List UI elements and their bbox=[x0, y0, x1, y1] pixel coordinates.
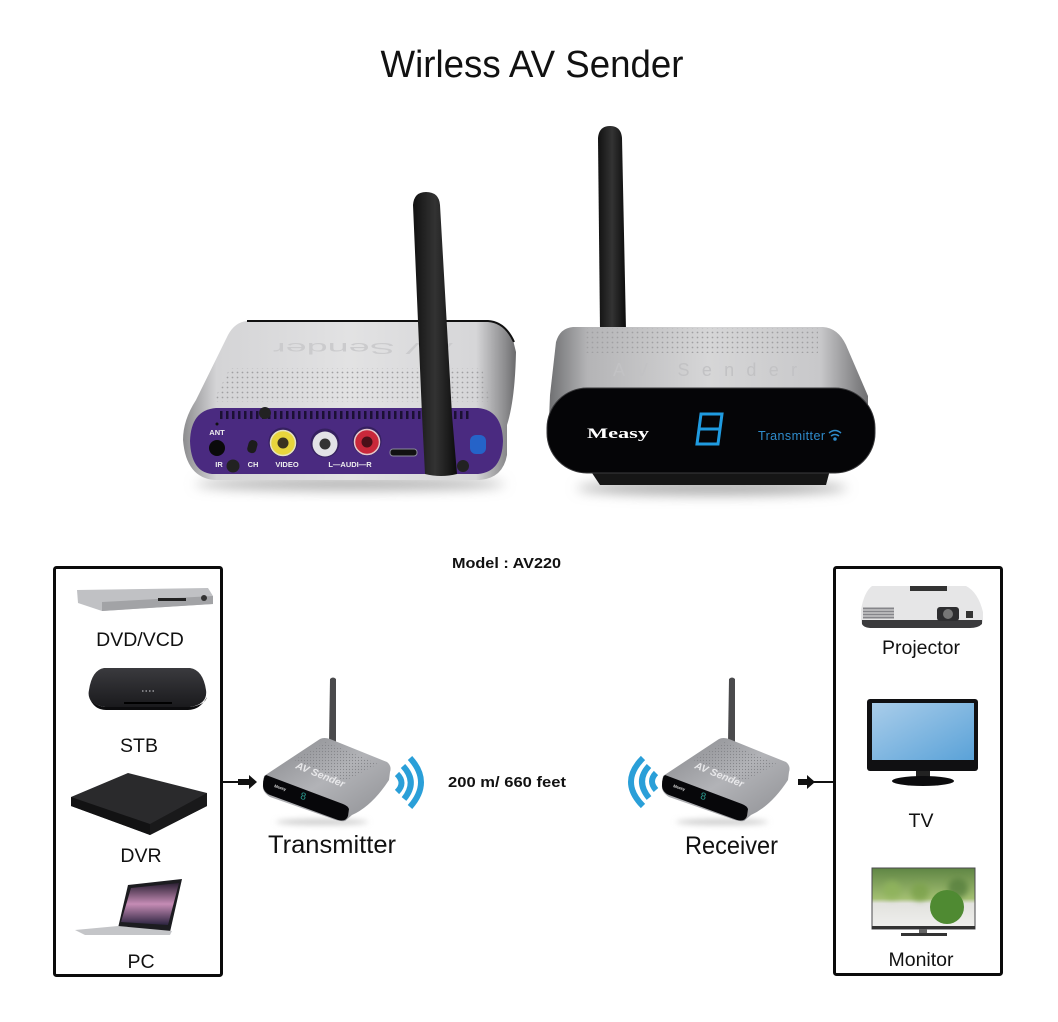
icon: laptop bbox=[75, 879, 182, 935]
receiver unit: AV Sender bbox=[692, 760, 746, 791]
product photo: front of unit bbox=[547, 126, 875, 495]
transmitter unit bbox=[263, 678, 391, 825]
label: STB bbox=[120, 735, 158, 757]
label: PC bbox=[127, 951, 155, 973]
title: Wirless AV Sender bbox=[380, 44, 684, 86]
receiver unit bbox=[662, 678, 790, 825]
purple panel: L—AUDI—R bbox=[328, 460, 372, 469]
distance label: 200 m/ 660 feet bbox=[448, 775, 566, 791]
purple panel bbox=[190, 407, 503, 474]
icon: monitor bbox=[872, 868, 975, 936]
product photo: front of unit: AV Sender bbox=[613, 360, 797, 380]
logo: Measy bbox=[587, 426, 650, 442]
icon: set-top box bbox=[89, 668, 207, 710]
icon: wifi waves in bbox=[631, 758, 656, 806]
purple panel: ANT bbox=[209, 428, 225, 437]
icon: wifi bbox=[829, 430, 841, 440]
transmitter label: Transmitter bbox=[758, 429, 825, 443]
arrow: sources to transmitter bbox=[222, 775, 257, 789]
icon: DVD player bbox=[77, 588, 213, 611]
icon: projector bbox=[861, 586, 983, 628]
black face bbox=[547, 388, 875, 473]
receiver unit: Measy bbox=[673, 783, 687, 792]
product photo: rear of unit: AV Sender bbox=[271, 339, 453, 356]
purple panel: IR bbox=[215, 460, 223, 469]
icon: TV bbox=[867, 699, 978, 786]
transmitter label: Transmitter bbox=[268, 831, 396, 859]
label: TV bbox=[909, 810, 933, 832]
icon: wifi waves out bbox=[397, 758, 421, 807]
label: Monitor bbox=[888, 949, 954, 971]
model label: Model : AV220 bbox=[452, 556, 561, 572]
label: Projector bbox=[882, 637, 961, 659]
antenna bbox=[413, 192, 457, 476]
purple panel: VIDEO bbox=[275, 460, 299, 469]
panel: displays bbox=[834, 568, 1002, 974]
label: DVR bbox=[120, 845, 162, 867]
icon: DVR bbox=[71, 773, 207, 835]
label: DVD/VCD bbox=[96, 629, 184, 651]
transmitter unit: AV Sender bbox=[293, 760, 347, 791]
receiver label: Receiver bbox=[685, 832, 778, 860]
transmitter unit: Measy bbox=[274, 783, 288, 792]
seven-segment digit bbox=[697, 414, 722, 444]
antenna bbox=[598, 126, 626, 330]
panel: sources bbox=[54, 568, 222, 976]
receiver unit: 8 bbox=[699, 791, 707, 803]
transmitter unit: 8 bbox=[299, 791, 307, 803]
purple panel: CH bbox=[248, 460, 258, 469]
arrow: receiver to displays bbox=[798, 775, 834, 789]
product photo: rear of unit bbox=[183, 192, 516, 490]
